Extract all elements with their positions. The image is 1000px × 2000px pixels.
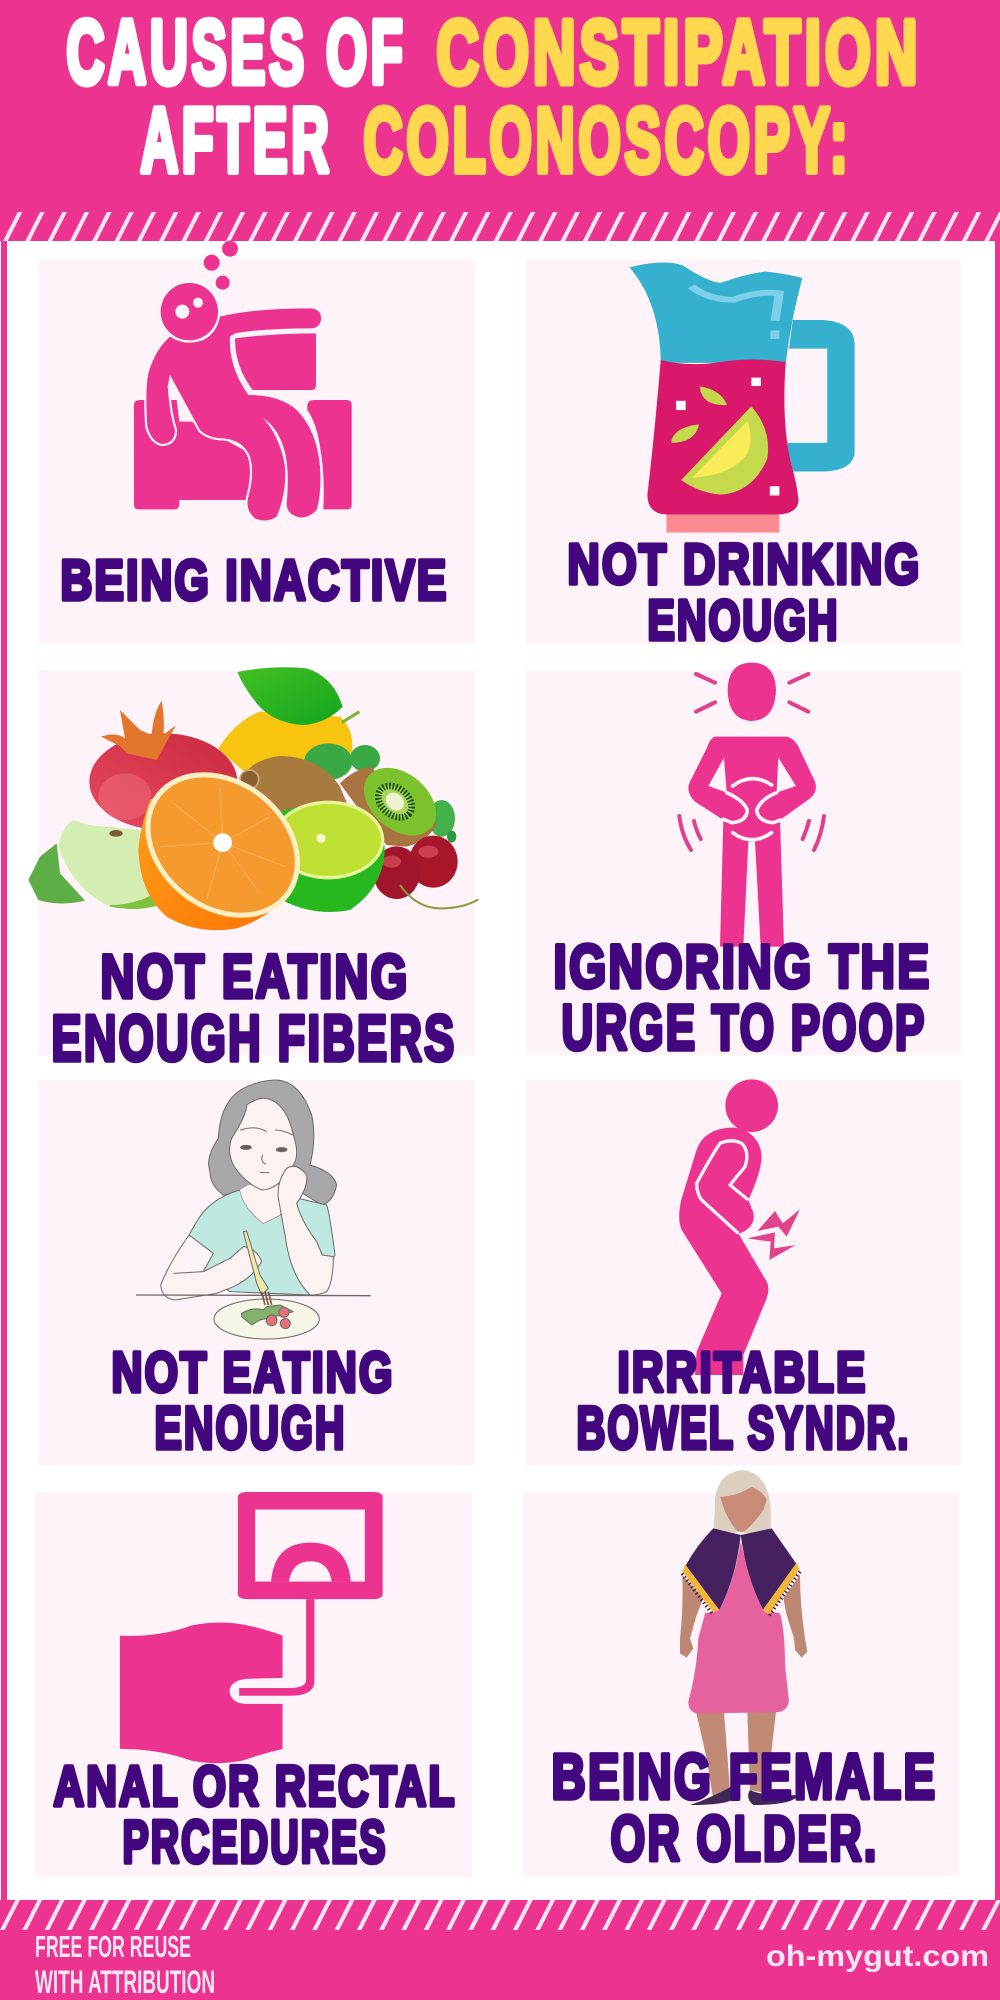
panel: being female or older bbox=[523, 1470, 959, 1877]
icon: pile of fruit bbox=[28, 667, 478, 948]
label: ignoring the urge to poop bbox=[554, 932, 932, 1064]
title bbox=[66, 3, 922, 192]
label: being female or older: OR OLDER. bbox=[610, 1802, 878, 1874]
panel: anal or rectal procedures bbox=[35, 1492, 472, 1877]
header banner bbox=[0, 0, 1000, 241]
icon: older woman in pink dress bbox=[680, 1470, 807, 1805]
website url: oh-mygut.com bbox=[766, 1940, 989, 1973]
panel: ignoring the urge to poop bbox=[526, 663, 961, 1064]
attribution note: WITH ATTRIBUTION bbox=[35, 1964, 215, 2000]
label: not eating enough: ENOUGH bbox=[154, 1394, 346, 1462]
label: irritable bowel syndrome bbox=[576, 1340, 910, 1462]
label: being female or older bbox=[552, 1740, 938, 1874]
label: anal or rectal procedures: ANAL OR RECTAL bbox=[54, 1754, 456, 1818]
icon: person holding belly bbox=[679, 663, 824, 947]
icon: rectal examination diagram bbox=[120, 1492, 383, 1763]
label: not eating enough bbox=[112, 1340, 394, 1462]
footer banner bbox=[0, 1900, 1000, 2000]
panel: not eating enough bbox=[38, 1080, 475, 1465]
label: being inactive: BEING INACTIVE bbox=[60, 548, 448, 612]
label: not eating enough fibers: NOT EATING bbox=[100, 942, 410, 1010]
label: anal or rectal procedures: PRCEDURES bbox=[122, 1808, 388, 1876]
icon: pitcher bbox=[630, 263, 855, 533]
panel: not eating enough fibers bbox=[28, 667, 478, 1074]
title: AFTER bbox=[140, 90, 332, 192]
label: not drinking enough bbox=[568, 532, 922, 652]
label: irritable bowel syndrome: IRRITABLE bbox=[618, 1340, 868, 1404]
panel: being inactive bbox=[38, 241, 475, 644]
title: CAUSES OF bbox=[66, 3, 406, 103]
label: anal or rectal procedures bbox=[54, 1754, 456, 1876]
icon: sad woman at plate bbox=[136, 1080, 371, 1339]
attribution note: FREE FOR REUSE bbox=[35, 1929, 191, 1964]
panel: irritable bowel syndrome bbox=[526, 1079, 961, 1465]
panel: not drinking enough bbox=[526, 259, 961, 652]
icon: bent person in pain bbox=[679, 1079, 800, 1375]
attribution note bbox=[35, 1929, 215, 2000]
label: not eating enough fibers: ENOUGH FIBERS bbox=[52, 1002, 456, 1074]
label: not eating enough fibers bbox=[52, 942, 456, 1074]
icon: person slumped on sofa bbox=[134, 241, 352, 520]
label: not drinking enough: ENOUGH bbox=[648, 588, 840, 652]
label: not eating enough: NOT EATING bbox=[112, 1340, 394, 1404]
